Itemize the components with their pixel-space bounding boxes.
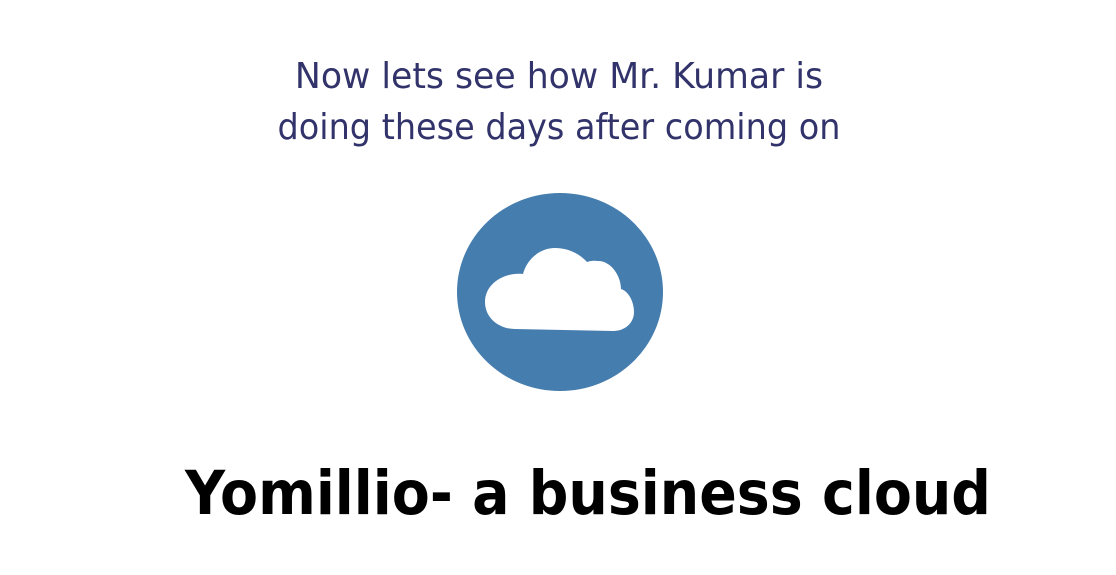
title: Yomillio- a business cloud: [185, 458, 990, 528]
intro text: [277, 56, 840, 148]
intro text line 1: Now lets see how Mr. Kumar is: [294, 56, 823, 97]
icon: cloud in blue circle: [457, 193, 663, 391]
intro text line 2: doing these days after coming on: [277, 106, 840, 148]
